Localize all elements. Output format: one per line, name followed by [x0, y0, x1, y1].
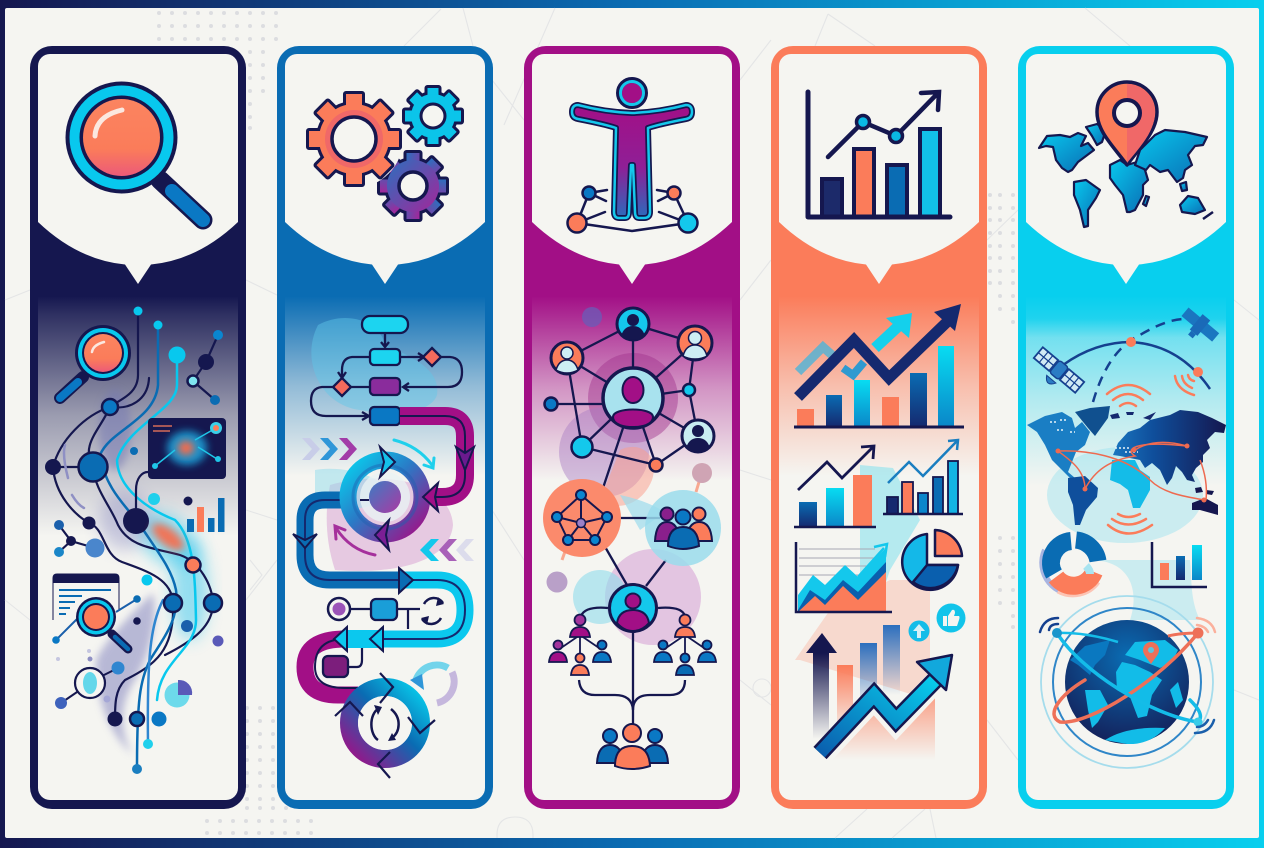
pie chart — [902, 530, 962, 590]
inspection circle — [55, 649, 124, 709]
small balloons — [546, 463, 712, 592]
rising bars — [837, 625, 900, 735]
magenta process box — [323, 648, 362, 677]
panel 5 inner sheet — [1026, 54, 1226, 800]
panel 5 colour band — [1026, 205, 1226, 297]
quarter pie — [164, 680, 192, 708]
panel 2 speech bubble — [285, 190, 485, 284]
area chart — [796, 542, 892, 612]
blue team disc — [645, 490, 721, 566]
panel 3: people and networks — [524, 46, 740, 809]
panel 1 inner sheet — [38, 54, 238, 800]
panel 2 fade — [285, 296, 485, 476]
illustration: people network — [543, 307, 721, 769]
coral network disc — [543, 479, 621, 557]
bottom team — [597, 724, 668, 769]
icon: magnifying glass — [66, 82, 203, 220]
chevrons — [302, 438, 474, 561]
panel 2 colour band — [285, 205, 485, 297]
navy up arrow — [806, 633, 837, 739]
panel 3 fade — [532, 296, 732, 481]
panel 1 fade — [38, 296, 238, 536]
orbit arcs — [1063, 319, 1210, 402]
icon: world map with location pin — [1039, 82, 1213, 227]
panel 4 colour band — [779, 205, 979, 297]
big cycle ring — [348, 447, 438, 550]
icon: person with network — [568, 80, 698, 232]
up arrow badge — [908, 620, 930, 642]
panel 1: search and discovery — [30, 46, 246, 809]
background arrows — [798, 320, 905, 375]
illustration: growth charts — [794, 304, 966, 760]
top bar chart — [794, 346, 964, 427]
browser window with magnifier — [52, 574, 141, 649]
faint small cycle — [410, 665, 454, 703]
hub avatar — [610, 584, 656, 632]
purple gear — [380, 153, 446, 219]
curved arrows — [335, 440, 434, 555]
panel 3 colour band — [532, 205, 732, 297]
big blue arrow — [820, 655, 952, 757]
connector lines — [551, 324, 698, 725]
panel 4 fade — [779, 296, 979, 476]
illustration: data discovery network — [45, 306, 226, 774]
illustration: workflow and cycles — [293, 316, 474, 778]
small bar chart — [1152, 542, 1207, 587]
wires — [53, 311, 218, 769]
panel 5 fade — [1026, 296, 1226, 486]
avatars — [544, 308, 714, 472]
icon: gears — [305, 88, 461, 219]
icon: bar chart with rising line — [808, 92, 950, 217]
panel 2 inner sheet — [285, 54, 485, 800]
panel 5 frame — [1018, 46, 1234, 809]
panel 2 frame — [277, 46, 493, 809]
panel 4 inner sheet — [779, 54, 979, 800]
panel 5 speech bubble — [1026, 190, 1226, 284]
flowchart nodes — [333, 316, 441, 425]
coral gear — [305, 90, 403, 188]
org tree left — [549, 614, 611, 675]
chart left — [794, 446, 876, 527]
central avatar — [603, 368, 663, 428]
org tree right — [654, 614, 716, 675]
panel 1 speech bubble — [38, 190, 238, 284]
panel 1 frame — [30, 46, 246, 809]
panel 2: process and workflow — [277, 46, 493, 809]
panel 4: analytics and growth — [771, 46, 987, 809]
heat panel — [148, 418, 226, 479]
panel 5: global reach — [1018, 46, 1234, 809]
satellite left — [1027, 347, 1085, 400]
signal arcs — [1040, 618, 1215, 733]
satellite right — [1175, 304, 1222, 349]
sync arrows — [371, 708, 399, 740]
connection lines — [1058, 442, 1206, 500]
donut chart — [1042, 540, 1098, 595]
blue and cyan flow bands — [305, 500, 465, 695]
panel 4 frame — [771, 46, 987, 809]
illustration: satellites and global connections — [1027, 304, 1226, 768]
flowchart connectors — [311, 333, 462, 420]
cyan gear — [405, 88, 461, 144]
blob — [148, 519, 188, 555]
magenta flow band — [400, 416, 465, 497]
globe — [1040, 596, 1215, 768]
world map — [1027, 406, 1226, 525]
small magnifier — [60, 325, 131, 398]
orbits — [1054, 633, 1200, 722]
big navy arrow — [798, 304, 961, 397]
flow row with sync icon — [328, 597, 444, 629]
panel 3 speech bubble — [532, 190, 732, 284]
thumbs up badge — [936, 604, 966, 632]
panel 3 inner sheet — [532, 54, 732, 800]
panel 4 speech bubble — [779, 190, 979, 284]
panel 3 frame — [524, 46, 740, 809]
wifi arcs — [1107, 375, 1194, 534]
chart right — [883, 440, 963, 514]
bottom cycle ring — [335, 673, 435, 778]
cyan swirl — [1047, 447, 1203, 543]
coral area under arrow — [822, 692, 935, 760]
panel 1 colour band — [38, 205, 238, 297]
small bar chart — [187, 498, 224, 532]
